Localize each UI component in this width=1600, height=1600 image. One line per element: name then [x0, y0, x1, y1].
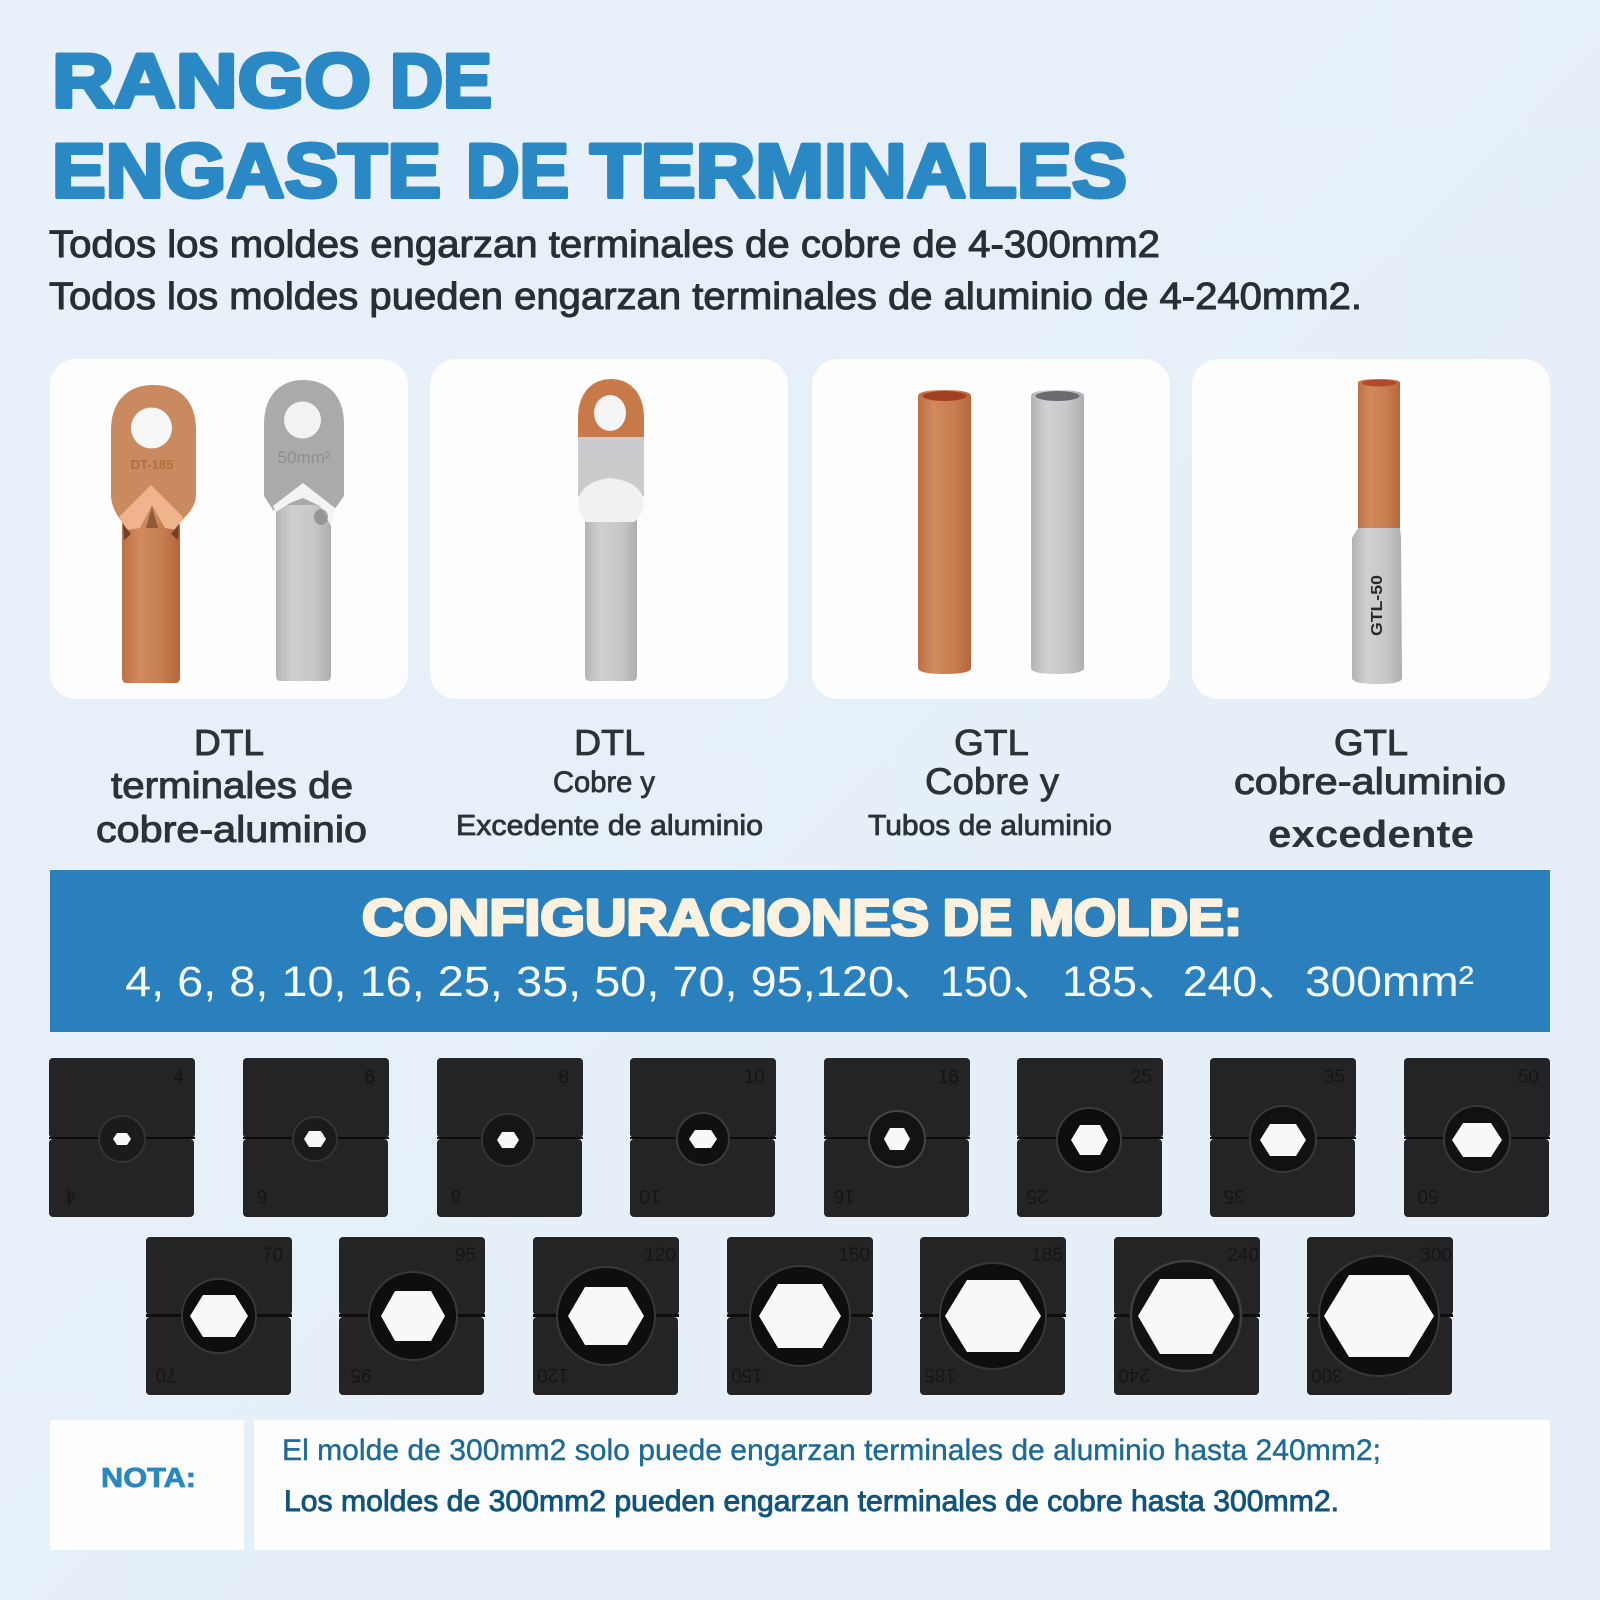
icon: aluminium tube	[1031, 390, 1084, 674]
die 70: 70	[155, 1364, 177, 1385]
label: GTL copper-aluminium excess: excedente	[1268, 814, 1474, 856]
label: GTL copper-aluminium excess	[1234, 722, 1506, 856]
banner heading: CONFIGURACIONES	[362, 889, 929, 946]
label: DTL copper and aluminium excess	[456, 722, 763, 842]
banner size list: 185	[1062, 958, 1137, 1006]
icon: aluminium lug: 50mm²	[278, 448, 331, 467]
label: GTL copper and aluminium tubes: Tubos de aluminio	[868, 810, 1112, 842]
panel: note text	[254, 1420, 1550, 1550]
die 150: 150	[731, 1364, 763, 1385]
die 185: 185	[1031, 1245, 1063, 1266]
die 25: 25	[1131, 1067, 1152, 1088]
die 120: 120	[644, 1245, 676, 1266]
die 25: 25	[1026, 1185, 1048, 1206]
label: DTL copper-aluminium: DTL	[194, 722, 264, 763]
die 50	[1404, 1058, 1550, 1217]
die 50: 50	[1518, 1067, 1539, 1088]
die 240: 240	[1227, 1245, 1259, 1266]
icon: copper tube	[918, 390, 971, 674]
banner size list: 、	[1258, 958, 1301, 1006]
die 8	[437, 1058, 583, 1217]
label: GTL copper-aluminium excess: GTL	[1334, 722, 1408, 763]
panel: note text: Los moldes de 300mm2 pueden engarzan terminales de cobre hasta 300mm2.	[284, 1485, 1339, 1518]
subtitle: Todos los moldes pueden engarzan terminales de aluminio de 4-240mm2.	[49, 276, 1362, 318]
die 120: 120	[537, 1364, 569, 1385]
die 16: 16	[938, 1067, 959, 1088]
die 150: 150	[838, 1245, 870, 1266]
label: DTL copper and aluminium excess: Excedente de aluminio	[456, 810, 763, 842]
die 70: 70	[262, 1245, 283, 1266]
label: GTL copper and aluminium tubes: GTL	[954, 722, 1029, 763]
icon: copper-aluminium connector	[1352, 379, 1402, 684]
die 240: 240	[1118, 1364, 1150, 1385]
banner size list: 、	[894, 958, 937, 1006]
die 50: 50	[1417, 1185, 1439, 1206]
subtitle: Todos los moldes engarzan terminales de cobre de 4-300mm2	[49, 224, 1160, 266]
label: GTL copper-aluminium excess: cobre-aluminio	[1234, 761, 1506, 802]
die row 1	[49, 1058, 1550, 1217]
banner: mould configurations	[50, 870, 1550, 1032]
label: DTL copper-aluminium	[96, 722, 367, 850]
banner size list: 、	[1138, 958, 1181, 1006]
die 6: 6	[257, 1185, 267, 1206]
die 150	[727, 1237, 873, 1395]
panel: GTL copper and aluminium tubes	[812, 359, 1170, 699]
die 120	[533, 1237, 679, 1395]
die 35: 35	[1324, 1067, 1345, 1088]
banner size list: 、	[1013, 958, 1056, 1006]
die 25	[1017, 1058, 1163, 1217]
die 35	[1210, 1058, 1356, 1217]
die 16: 16	[833, 1185, 855, 1206]
panel: DTL copper and aluminium lugs	[50, 359, 408, 699]
die 10	[630, 1058, 776, 1217]
die 185	[920, 1237, 1066, 1395]
banner size list: 300mm²	[1305, 958, 1474, 1006]
label: GTL copper and aluminium tubes	[868, 722, 1112, 842]
panel: note label: NOTA:	[101, 1462, 196, 1493]
panel: GTL bimetal connector	[1192, 359, 1550, 699]
die 4: 4	[65, 1185, 76, 1206]
die 6	[243, 1058, 389, 1217]
icon: copper-aluminium lug	[578, 379, 644, 681]
die row 2	[146, 1237, 1453, 1395]
label: DTL copper and aluminium excess: DTL	[574, 722, 645, 763]
die 10: 10	[744, 1067, 765, 1088]
title: ENGASTE	[52, 129, 441, 214]
die 300: 300	[1420, 1245, 1452, 1266]
die 8: 8	[558, 1067, 569, 1088]
banner heading	[362, 889, 1242, 946]
label: DTL copper-aluminium: terminales de	[111, 765, 353, 806]
die 6: 6	[364, 1067, 375, 1088]
banner size list: 150	[940, 958, 1012, 1006]
icon: copper-aluminium connector: GTL-50	[1369, 575, 1386, 636]
icon: copper lug: DT-185	[131, 457, 173, 472]
banner heading: DE	[943, 889, 1012, 946]
title: DE	[390, 39, 492, 124]
panel: note label	[50, 1420, 244, 1550]
die 10: 10	[639, 1185, 661, 1206]
banner size list: 240	[1183, 958, 1257, 1006]
die 300: 300	[1311, 1364, 1343, 1385]
die 240	[1114, 1237, 1260, 1395]
die 70	[146, 1237, 292, 1395]
die 16	[824, 1058, 970, 1217]
title	[52, 39, 1127, 214]
title: TERMINALES	[590, 129, 1127, 214]
label: DTL copper-aluminium: cobre-aluminio	[96, 809, 367, 850]
icon: aluminium lug	[264, 380, 344, 681]
die 4: 4	[173, 1067, 184, 1088]
icon: copper lug	[111, 385, 196, 683]
die 95: 95	[455, 1245, 476, 1266]
die 8: 8	[451, 1185, 461, 1206]
label: GTL copper and aluminium tubes: Cobre y	[925, 761, 1060, 802]
die 4	[49, 1058, 195, 1217]
banner size list: 4, 6, 8, 10, 16, 25, 35, 50, 70, 95,120	[125, 958, 894, 1006]
subtitle	[49, 224, 1362, 318]
banner heading: MOLDE:	[1029, 889, 1242, 946]
die 35: 35	[1223, 1185, 1245, 1206]
title: DE	[466, 129, 569, 214]
panel: DTL bimetal lug	[430, 359, 788, 699]
label: DTL copper and aluminium excess: Cobre y	[553, 766, 655, 799]
die 185: 185	[924, 1364, 956, 1385]
die 95	[339, 1237, 485, 1395]
die 300	[1307, 1237, 1453, 1395]
title: RANGO	[52, 39, 371, 124]
panel: note text: El molde de 300mm2 solo puede engarzan terminales de aluminio hasta 240mm2;	[282, 1434, 1381, 1467]
banner size list	[125, 958, 1474, 1006]
die 95: 95	[350, 1364, 372, 1385]
